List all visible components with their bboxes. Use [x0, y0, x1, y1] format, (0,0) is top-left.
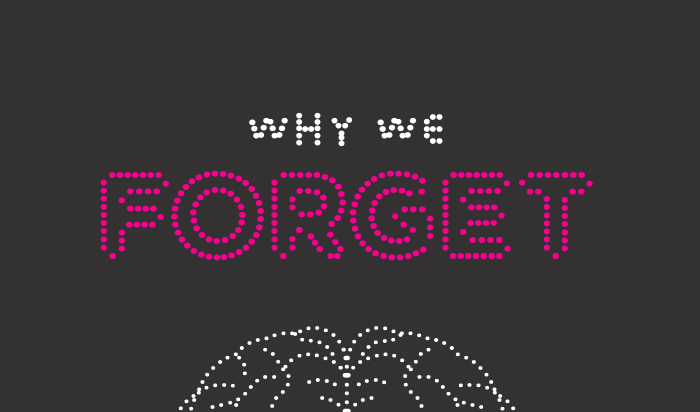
brain right hemisphere: [341, 328, 513, 409]
letter F: [104, 175, 166, 256]
letter T: [522, 175, 590, 256]
brain centre column: [345, 358, 348, 411]
brain left hemisphere: [181, 328, 344, 409]
second letter W: [380, 121, 413, 136]
letter Y: [334, 120, 349, 143]
letter O: [174, 174, 261, 257]
letter H: [299, 116, 318, 143]
letter E: [445, 175, 508, 256]
illustration: dotted brain: [181, 328, 513, 411]
letter E: [427, 117, 440, 141]
letter W: [252, 121, 285, 136]
letter G: [353, 174, 430, 257]
letter R: [274, 175, 343, 256]
